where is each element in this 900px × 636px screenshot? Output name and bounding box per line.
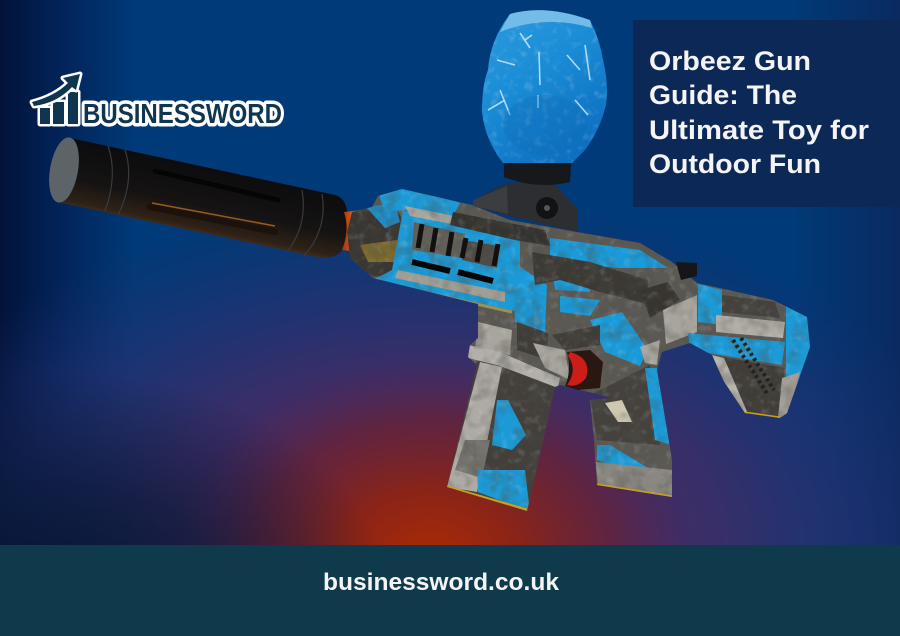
gun body with camo xyxy=(340,180,820,520)
logo: Businessword xyxy=(32,74,282,129)
footer bar xyxy=(0,545,900,636)
suppressor barrel xyxy=(44,135,348,258)
receiver blue xyxy=(513,238,668,333)
title: Ultimate Toy for xyxy=(649,115,870,145)
handguard xyxy=(373,210,520,312)
receiver dark xyxy=(532,252,648,304)
handguard vents xyxy=(418,224,498,266)
hopper collar xyxy=(504,160,571,185)
suppressor end cap xyxy=(44,135,84,205)
gun illustration xyxy=(44,4,820,520)
orange muzzle xyxy=(342,210,368,252)
stock ribs xyxy=(733,338,774,395)
panel: title xyxy=(633,20,900,207)
yellow underside edge xyxy=(447,413,780,510)
hopper mount xyxy=(473,160,578,232)
rear sight post xyxy=(676,262,697,280)
grip xyxy=(590,365,660,445)
title: Orbeez Gun xyxy=(649,46,811,76)
stock xyxy=(698,284,722,325)
footer website text: businessword.co.uk xyxy=(323,569,560,596)
camo texture xyxy=(360,191,809,508)
title: Outdoor Fun xyxy=(649,149,821,179)
water bead hopper bottle xyxy=(482,10,607,163)
muzzle shroud xyxy=(347,205,405,278)
title: Guide: The xyxy=(649,80,797,110)
icon: rising arrow over bars xyxy=(32,74,80,124)
logo wordmark: BUSINESSWORD xyxy=(83,98,282,129)
magazine xyxy=(447,355,560,511)
trigger xyxy=(565,350,603,390)
receiver light xyxy=(475,295,697,380)
title xyxy=(649,46,870,179)
